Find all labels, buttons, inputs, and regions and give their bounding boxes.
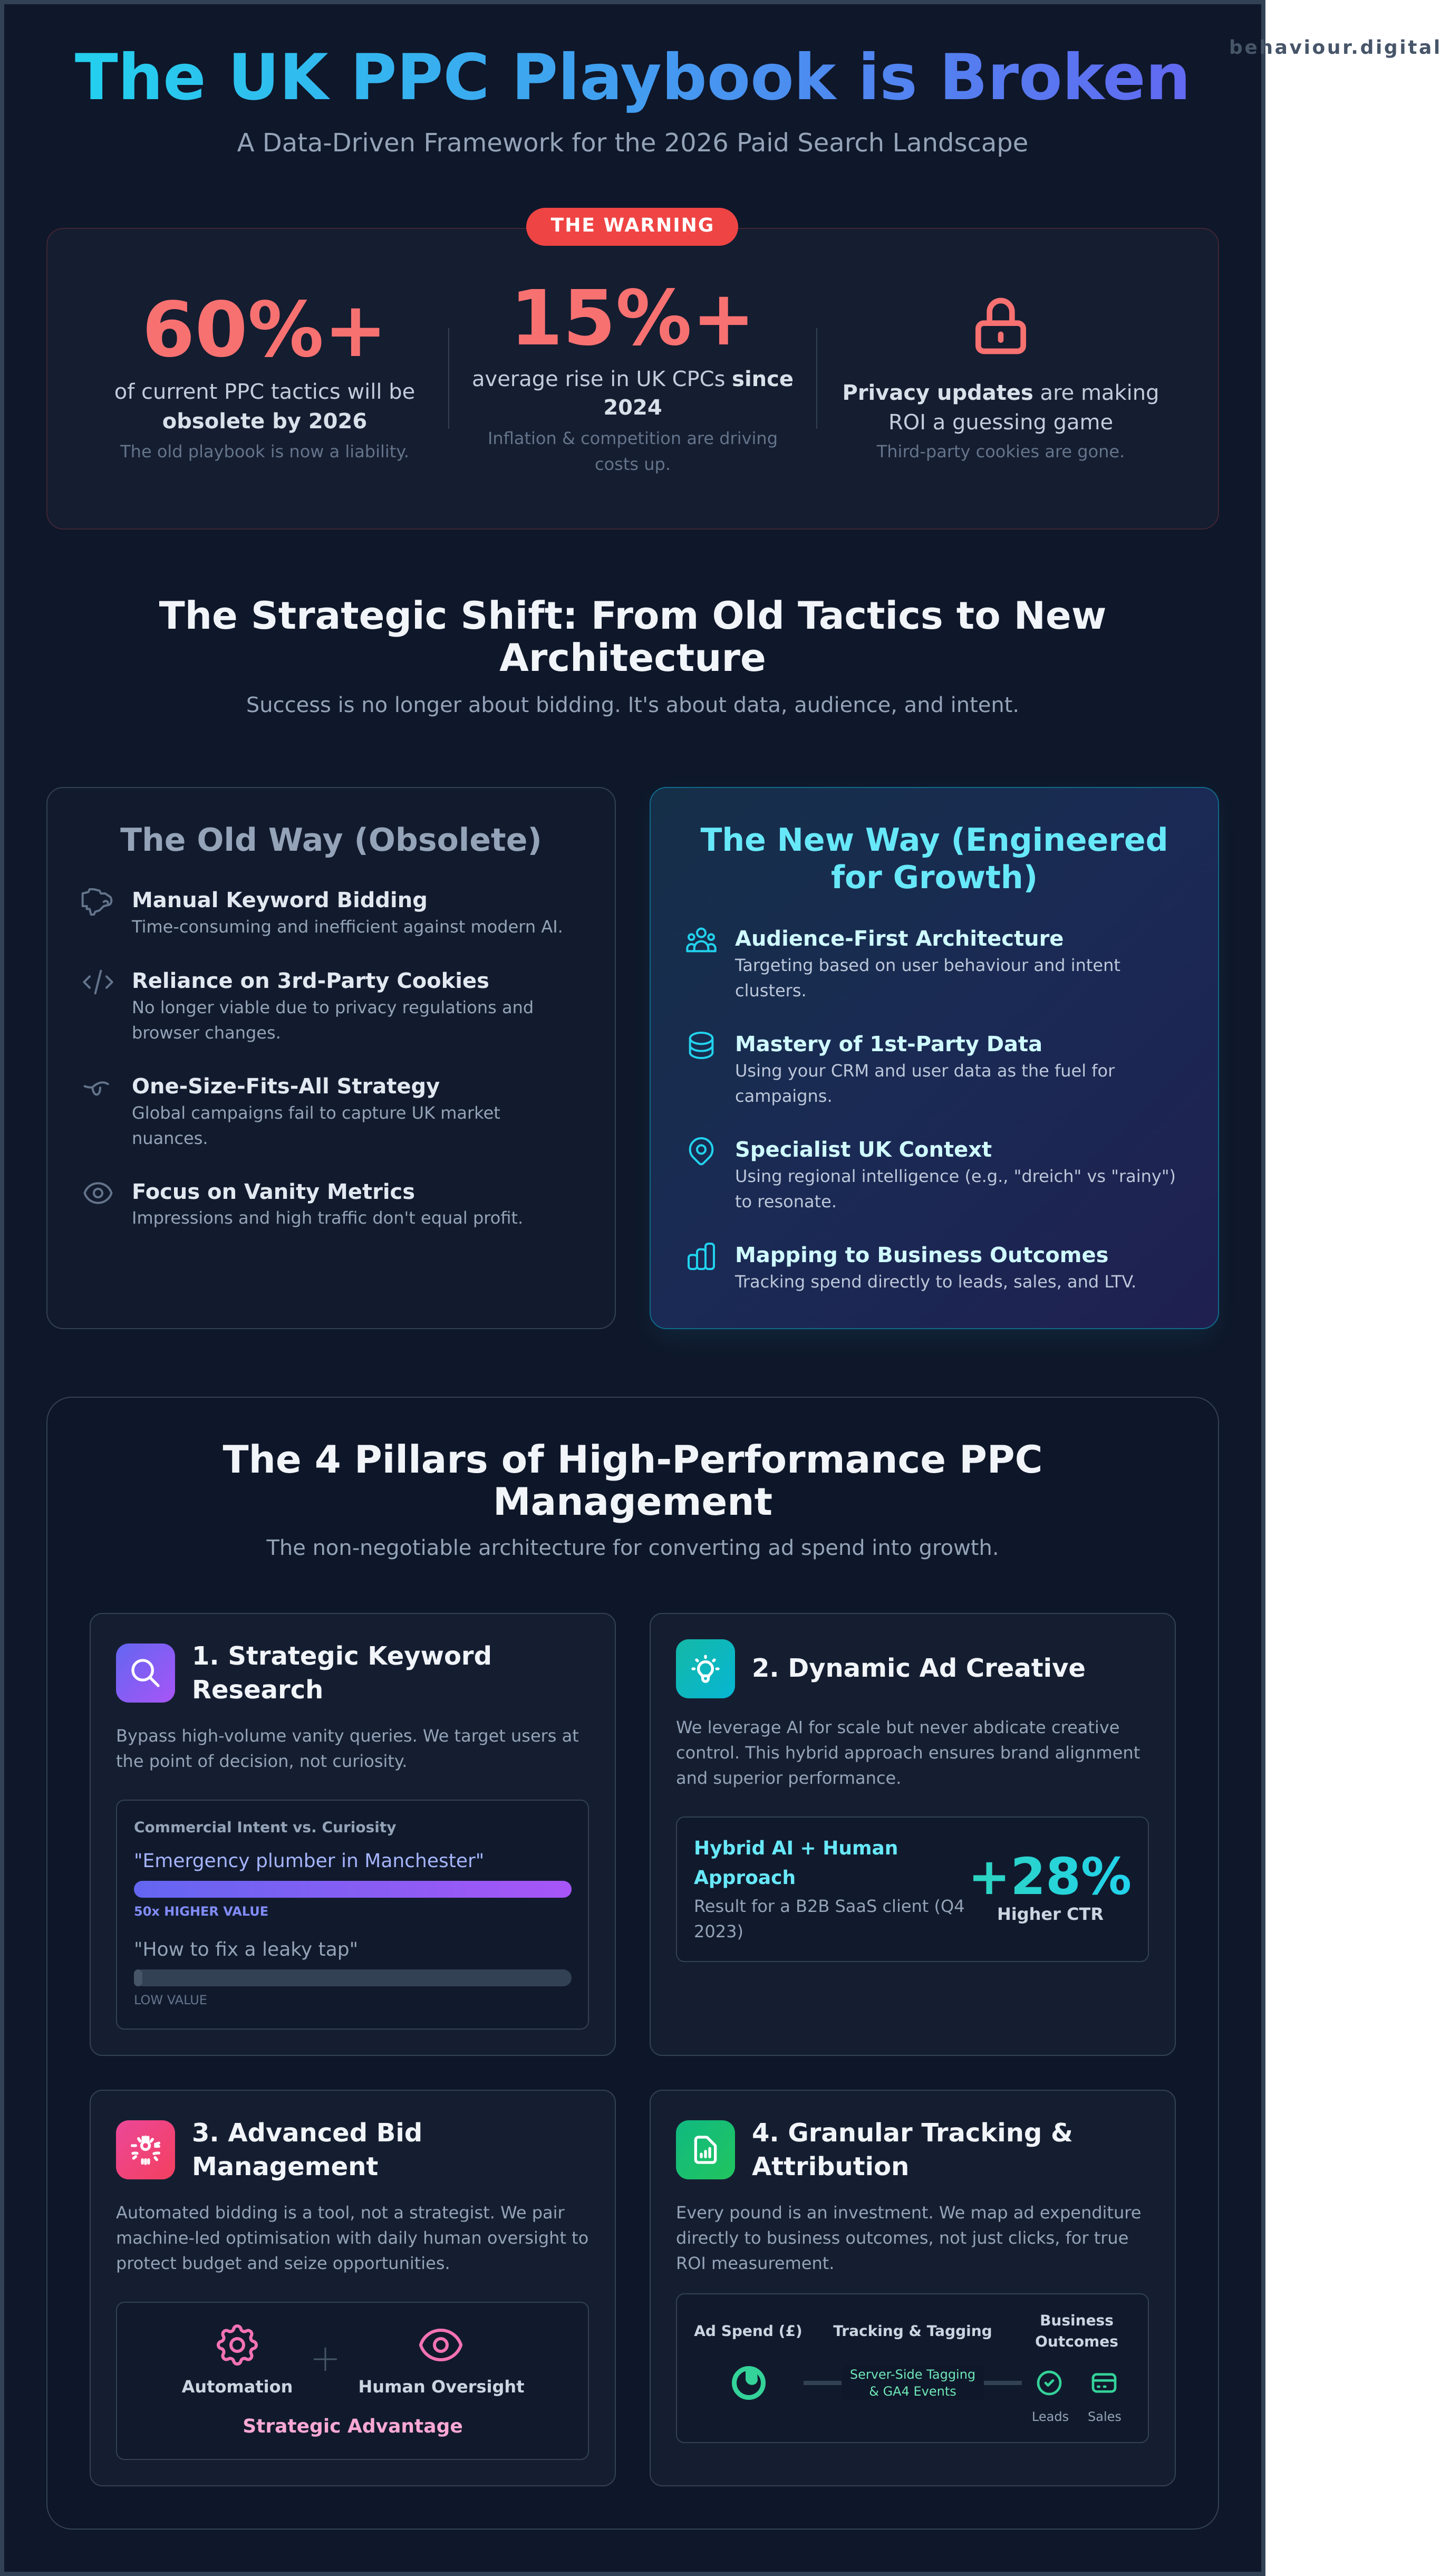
item: one-size-fits-all: Global campaigns fail to capture UK market bbox=[132, 1103, 500, 1123]
callout: hybrid result: +28% bbox=[968, 1847, 1132, 1906]
stat: 15%+ CPC rise: costs up. bbox=[595, 454, 671, 474]
arrow: tagging to outcomes bbox=[984, 2381, 1022, 2385]
item: third-party cookies: Reliance on 3rd-Party Cookies bbox=[132, 969, 489, 993]
stat: 15%+ CPC rise: 15%+ bbox=[510, 274, 756, 362]
card 4 title: 4. Granular Tracking & bbox=[752, 2118, 1073, 2148]
card: granular tracking and attribution bbox=[650, 2090, 1175, 2486]
item: one-size-fits-all: One-Size-Fits-All Strategy bbox=[132, 1074, 440, 1099]
card 1 description: the point of decision, not curiosity. bbox=[116, 1751, 407, 1771]
new way heading bbox=[700, 822, 1168, 896]
card 3 title bbox=[192, 2118, 422, 2181]
item: manual keyword bidding: Time-consuming and inefficient against modern AI. bbox=[131, 917, 563, 937]
flow diagram: spend to outcomes: Sales bbox=[1088, 2409, 1122, 2424]
warning panel background bbox=[47, 228, 1219, 529]
stat: 60%+ obsolete bbox=[114, 285, 415, 462]
icon: light bulb bbox=[676, 1639, 735, 1698]
card 2 description: and superior performance. bbox=[676, 1768, 901, 1788]
item: business outcomes bbox=[689, 1243, 1136, 1292]
card 2 description bbox=[676, 1717, 1140, 1788]
chart: commercial intent vs curiosity: "Emergency plumber in Manchester" bbox=[134, 1850, 484, 1872]
stat: 60%+ obsolete: obsolete by 2026 bbox=[162, 409, 367, 434]
item: first-party data: Using your CRM and user data as the fuel for bbox=[735, 1061, 1115, 1081]
stat: 60%+ obsolete: of current PPC tactics will be bbox=[114, 380, 415, 404]
item: uk context: Using regional intelligence (e.g., "dreich" vs "rainy") bbox=[735, 1166, 1176, 1186]
new way glow bbox=[654, 796, 1215, 1338]
item: manual keyword bidding: Manual Keyword Bidding bbox=[132, 888, 428, 912]
item: business outcomes: Mapping to Business Outcomes bbox=[735, 1243, 1108, 1267]
flow diagram: spend to outcomes: Ad Spend (£) bbox=[694, 2322, 803, 2340]
item: third-party cookies bbox=[84, 969, 534, 1043]
icon: users bbox=[687, 929, 716, 951]
icon: code bbox=[84, 971, 112, 993]
card 3 title: 3. Advanced Bid bbox=[192, 2118, 422, 2148]
item: uk context bbox=[690, 1138, 1176, 1212]
diagram: automation plus human oversight: Automation bbox=[182, 2377, 293, 2397]
card 4 title: Attribution bbox=[752, 2152, 909, 2181]
icon: plus bbox=[314, 2348, 337, 2371]
panel: the 4 pillars bbox=[47, 1397, 1219, 2529]
callout: hybrid result: Higher CTR bbox=[997, 1904, 1104, 1924]
icon: location pin bbox=[690, 1138, 712, 1164]
panel: the old way bbox=[47, 787, 615, 1329]
item: audience-first: Targeting based on user behaviour and intent bbox=[734, 955, 1120, 975]
item: uk context: to resonate. bbox=[735, 1191, 837, 1212]
icon: document report bbox=[676, 2120, 735, 2179]
card 2 description: control. This hybrid approach ensures brand alignment bbox=[676, 1743, 1140, 1763]
card 3 title: Management bbox=[192, 2152, 378, 2181]
item: manual keyword bidding bbox=[83, 888, 563, 937]
item: third-party cookies: No longer viable due to privacy regulations and bbox=[132, 997, 534, 1017]
diagram: automation plus human oversight: Strategic Advantage bbox=[243, 2416, 463, 2437]
card 2 description: We leverage AI for scale but never abdicate creative bbox=[676, 1717, 1119, 1737]
icon: check circle bbox=[1038, 2372, 1060, 2394]
stat: privacy updates: Third-party cookies are gone. bbox=[876, 441, 1125, 462]
item: vanity metrics: Focus on Vanity Metrics bbox=[132, 1180, 415, 1204]
item: vanity metrics: Impressions and high traffic don't equal profit. bbox=[132, 1208, 523, 1228]
item: audience-first: Audience-First Architecture bbox=[735, 927, 1064, 951]
icon: database bbox=[690, 1033, 712, 1058]
stat: 60%+ obsolete: The old playbook is now a liability. bbox=[120, 441, 409, 462]
panel: the warning bbox=[47, 208, 1219, 529]
item: uk context: Specialist UK Context bbox=[735, 1138, 992, 1162]
stat: 15%+ CPC rise: 2024 bbox=[603, 396, 662, 420]
item: first-party data bbox=[690, 1032, 1115, 1106]
card 1 title: Research bbox=[192, 1675, 323, 1705]
card 2 title: 2. Dynamic Ad Creative bbox=[752, 1654, 1086, 1683]
icon: cog bbox=[218, 2326, 256, 2364]
card 1 title bbox=[192, 1641, 492, 1705]
new way heading: for Growth) bbox=[831, 859, 1038, 896]
callout: hybrid result: 2023) bbox=[694, 1921, 743, 1941]
card 4 description bbox=[676, 2203, 1141, 2273]
chart: commercial intent vs curiosity: Commercial Intent vs. Curiosity bbox=[134, 1819, 397, 1836]
card: dynamic ad creative bbox=[650, 1613, 1175, 2055]
card 3 description bbox=[116, 2203, 588, 2273]
flow diagram: spend to outcomes bbox=[676, 2294, 1148, 2443]
card 3 description: protect budget and seize opportunities. bbox=[116, 2253, 450, 2273]
item: first-party data: campaigns. bbox=[735, 1086, 833, 1106]
heading: strategic shift: Success is no longer about bidding. It's about data, audience, and intent. bbox=[246, 693, 1019, 717]
old way heading: The Old Way (Obsolete) bbox=[120, 822, 542, 859]
stat: privacy updates bbox=[843, 301, 1159, 462]
chart: commercial intent vs curiosity: 50x HIGHER VALUE bbox=[134, 1904, 268, 1919]
icon: manual bidding bbox=[83, 889, 111, 915]
pillars heading bbox=[223, 1437, 1042, 1560]
item: third-party cookies: browser changes. bbox=[132, 1023, 281, 1043]
card 2 background bbox=[650, 1613, 1175, 2055]
subtitle: A Data-Driven Framework for the 2026 Paid Search Landscape bbox=[237, 128, 1028, 158]
icon: one-size strategy bbox=[85, 1082, 108, 1094]
pillars heading: Management bbox=[493, 1479, 772, 1524]
warning badge bbox=[526, 208, 738, 246]
card 1 background bbox=[90, 1613, 615, 2055]
chart: commercial intent vs curiosity bbox=[117, 1800, 588, 2029]
diagram: automation plus human oversight bbox=[117, 2302, 588, 2459]
item: audience-first bbox=[687, 927, 1120, 1001]
callout: hybrid result: Result for a B2B SaaS client (Q4 bbox=[694, 1896, 965, 1916]
flow diagram: spend to outcomes: Tracking & Tagging bbox=[833, 2322, 992, 2340]
callout: hybrid result: Hybrid AI + Human bbox=[694, 1838, 898, 1859]
card: advanced bid management bbox=[90, 2090, 615, 2486]
card 1 title: 1. Strategic Keyword bbox=[192, 1641, 492, 1671]
new way background bbox=[650, 787, 1219, 1329]
card 3 background bbox=[90, 2090, 615, 2486]
card 1 description bbox=[116, 1726, 579, 1771]
card 4 background bbox=[650, 2090, 1175, 2486]
label: server-side tagging: & GA4 Events bbox=[869, 2384, 956, 2399]
item: first-party data: Mastery of 1st-Party Data bbox=[735, 1032, 1042, 1056]
label: server-side tagging: Server-Side Tagging bbox=[850, 2367, 975, 2382]
stat: 60%+ obsolete: 60%+ bbox=[142, 285, 388, 374]
flow diagram: spend to outcomes: Leads bbox=[1032, 2409, 1069, 2424]
card 4 description: directly to business outcomes, not just clicks, for true bbox=[676, 2228, 1128, 2248]
chart: commercial intent vs curiosity: "How to fix a leaky tap" bbox=[134, 1939, 358, 1960]
label: server-side tagging bbox=[842, 2366, 984, 2400]
item: vanity metrics bbox=[85, 1180, 523, 1228]
card 4 description: ROI measurement. bbox=[676, 2253, 834, 2273]
item: one-size-fits-all bbox=[85, 1074, 500, 1148]
item: business outcomes: Tracking spend directly to leads, sales, and LTV. bbox=[734, 1272, 1136, 1292]
arrow: spend to tagging bbox=[804, 2381, 842, 2385]
item: one-size-fits-all: nuances. bbox=[132, 1128, 208, 1148]
heading: strategic shift bbox=[159, 593, 1106, 717]
pillars heading: The 4 Pillars of High-Performance PPC bbox=[223, 1437, 1042, 1482]
stat: 15%+ CPC rise: Inflation & competition are driving bbox=[488, 428, 778, 448]
warning badge: THE WARNING bbox=[551, 215, 714, 236]
card 4 title bbox=[752, 2118, 1073, 2181]
new way heading: The New Way (Engineered bbox=[700, 822, 1168, 859]
panel: the new way bbox=[650, 787, 1219, 1338]
card 3 description: machine-led optimisation with daily human oversight to bbox=[116, 2228, 588, 2248]
icon: lock bbox=[978, 301, 1023, 351]
watermark: behaviour.digital: behaviour.digital bbox=[1229, 37, 1442, 59]
flow diagram: spend to outcomes: Outcomes bbox=[1035, 2333, 1118, 2350]
stat: 15%+ CPC rise bbox=[472, 274, 794, 474]
icon: eye bbox=[85, 1183, 111, 1203]
pillars heading: The non-negotiable architecture for converting ad spend into growth. bbox=[266, 1536, 999, 1560]
item: audience-first: clusters. bbox=[735, 981, 807, 1001]
icon: eye bbox=[421, 2330, 461, 2360]
card: strategic keyword research bbox=[90, 1613, 615, 2055]
stat: 15%+ CPC rise: average rise in UK CPCs since bbox=[472, 367, 794, 391]
chart: commercial intent vs curiosity: LOW VALUE bbox=[134, 1993, 207, 2007]
flow diagram: spend to outcomes: Business bbox=[1040, 2312, 1114, 2329]
card 4 description: Every pound is an investment. We map ad expenditure bbox=[676, 2203, 1141, 2223]
icon: ad spend bbox=[734, 2368, 763, 2398]
icon: credit card bbox=[1093, 2375, 1115, 2391]
card 3 description: Automated bidding is a tool, not a strategist. We pair bbox=[116, 2203, 565, 2223]
stat: privacy updates: ROI a guessing game bbox=[888, 410, 1113, 435]
old way background bbox=[47, 787, 615, 1329]
card 1 description: Bypass high-volume vanity queries. We target users at bbox=[116, 1726, 579, 1746]
heading: strategic shift: Architecture bbox=[499, 636, 766, 680]
callout: hybrid result: Approach bbox=[694, 1867, 796, 1889]
diagram: automation plus human oversight: Human Oversight bbox=[359, 2377, 524, 2397]
stat: privacy updates: Privacy updates are making bbox=[843, 381, 1159, 405]
icon: bar chart bbox=[689, 1244, 714, 1269]
title: The UK PPC Playbook is Broken bbox=[75, 41, 1191, 114]
pillars outline bbox=[47, 1397, 1219, 2529]
callout: hybrid result bbox=[676, 1817, 1148, 1962]
heading: strategic shift: The Strategic Shift: From Old Tactics to New bbox=[159, 593, 1106, 638]
icon: search bbox=[116, 1643, 175, 1703]
icon: automation spark bbox=[116, 2120, 175, 2179]
